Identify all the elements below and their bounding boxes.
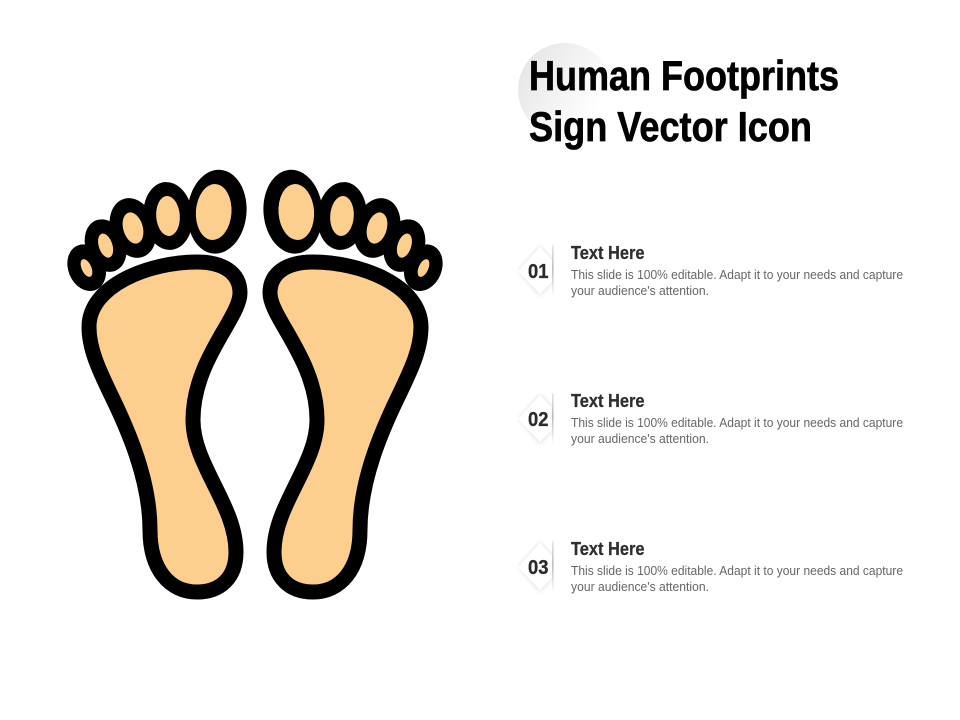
item 02 description [571,416,903,446]
number badge 03: 03 [528,556,548,579]
title accent circle [518,43,612,137]
icon: left footprint [61,167,250,592]
item 03 heading: Text Here [571,538,644,559]
number badge 01: 01 [528,260,548,283]
item 01 description [571,268,903,298]
item 02 description: This slide is 100% editable. Adapt it to your needs and capture [571,416,903,430]
item 02 [518,390,903,446]
title: Sign Vector Icon [529,103,812,150]
item 02 heading: Text Here [571,390,644,411]
item 01 heading: Text Here [571,242,644,263]
item 01 description: your audience's attention. [571,284,709,298]
item 03 description: This slide is 100% editable. Adapt it to your needs and capture [571,564,903,578]
item 01 description: This slide is 100% editable. Adapt it to your needs and capture [571,268,903,282]
item 01 [518,242,903,298]
number badge 01 [518,245,561,297]
number badge 03 [518,541,561,593]
icon: right footprint [260,167,449,592]
item 03 [518,538,903,594]
number badge 02: 02 [528,408,548,431]
item 03 description [571,564,903,594]
title: Human Footprints [529,52,839,99]
title [529,52,839,150]
number badge 02 [518,393,561,445]
item 03 description: your audience's attention. [571,580,709,594]
item 02 description: your audience's attention. [571,432,709,446]
